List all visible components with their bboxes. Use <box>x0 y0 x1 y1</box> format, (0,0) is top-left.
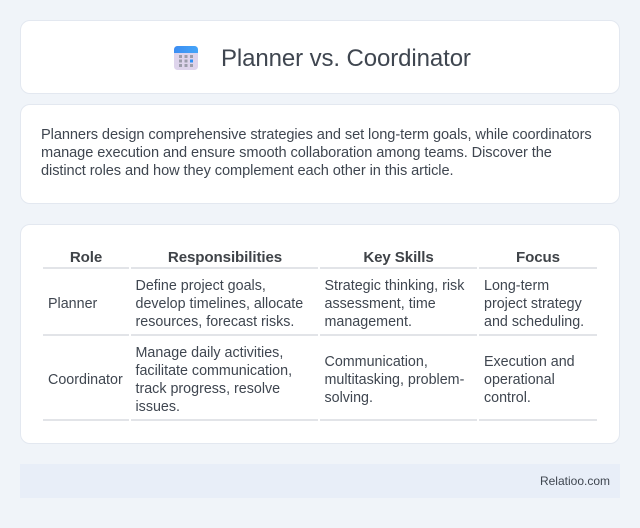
row: Planner responsibilities: Define project goals, <box>136 278 266 294</box>
intro text: Planners design comprehensive strategies and set long-term goals, while coordinators <box>41 127 592 143</box>
row: Coordinator responsibilities: Manage daily activities, <box>136 345 283 361</box>
intro text: manage execution and ensure smooth collaboration among teams. Discover the <box>41 145 552 161</box>
row: Planner key skills: Strategic thinking, risk <box>324 278 464 294</box>
table header: Responsibilities: Responsibilities <box>168 249 282 266</box>
row: Planner focus <box>484 278 584 330</box>
table header: Focus: Focus <box>516 249 560 266</box>
row: Coordinator responsibilities: track progress, resolve <box>136 381 280 397</box>
row: Coordinator focus: Execution and <box>484 354 575 370</box>
footer <box>20 464 620 498</box>
panel: comparison table <box>20 224 620 444</box>
row: Coordinator key skills <box>324 354 464 406</box>
intro text <box>41 127 592 179</box>
row: Coordinator focus: control. <box>484 390 531 406</box>
row: Planner key skills: management. <box>324 314 412 330</box>
row: Coordinator role: Coordinator <box>48 372 123 388</box>
intro text: distinct roles and how they complement each other in this article. <box>41 163 453 179</box>
row: Coordinator focus: operational <box>484 372 555 388</box>
row: Coordinator responsibilities: issues. <box>136 399 180 415</box>
row: Planner focus: project strategy <box>484 296 582 312</box>
row: Planner responsibilities: develop timelines, allocate <box>136 296 303 312</box>
panel: title card <box>20 20 620 94</box>
row: Planner responsibilities <box>136 278 303 330</box>
row: Coordinator responsibilities: facilitate communication, <box>136 363 292 379</box>
table header: Role: Role <box>70 249 102 266</box>
row: Planner key skills: assessment, time <box>324 296 436 312</box>
row: Planner responsibilities: resources, forecast risks. <box>136 314 294 330</box>
row: Coordinator key skills: Communication, <box>324 354 428 370</box>
row: Planner focus: and scheduling. <box>484 314 584 330</box>
row: Planner role: Planner <box>48 296 97 312</box>
footer credit: Relatioo.com <box>540 474 610 488</box>
title: Planner vs. Coordinator <box>221 45 471 72</box>
row: Coordinator key skills: solving. <box>324 390 373 406</box>
row: Coordinator focus <box>484 354 575 406</box>
row: Planner key skills <box>324 278 464 330</box>
table header: Key Skills: Key Skills <box>363 249 434 266</box>
row: Coordinator responsibilities <box>136 345 292 415</box>
row: Planner focus: Long-term <box>484 278 549 294</box>
row: Coordinator key skills: multitasking, problem- <box>324 372 464 388</box>
icon: calendar <box>174 46 198 70</box>
panel: introduction <box>20 104 620 204</box>
